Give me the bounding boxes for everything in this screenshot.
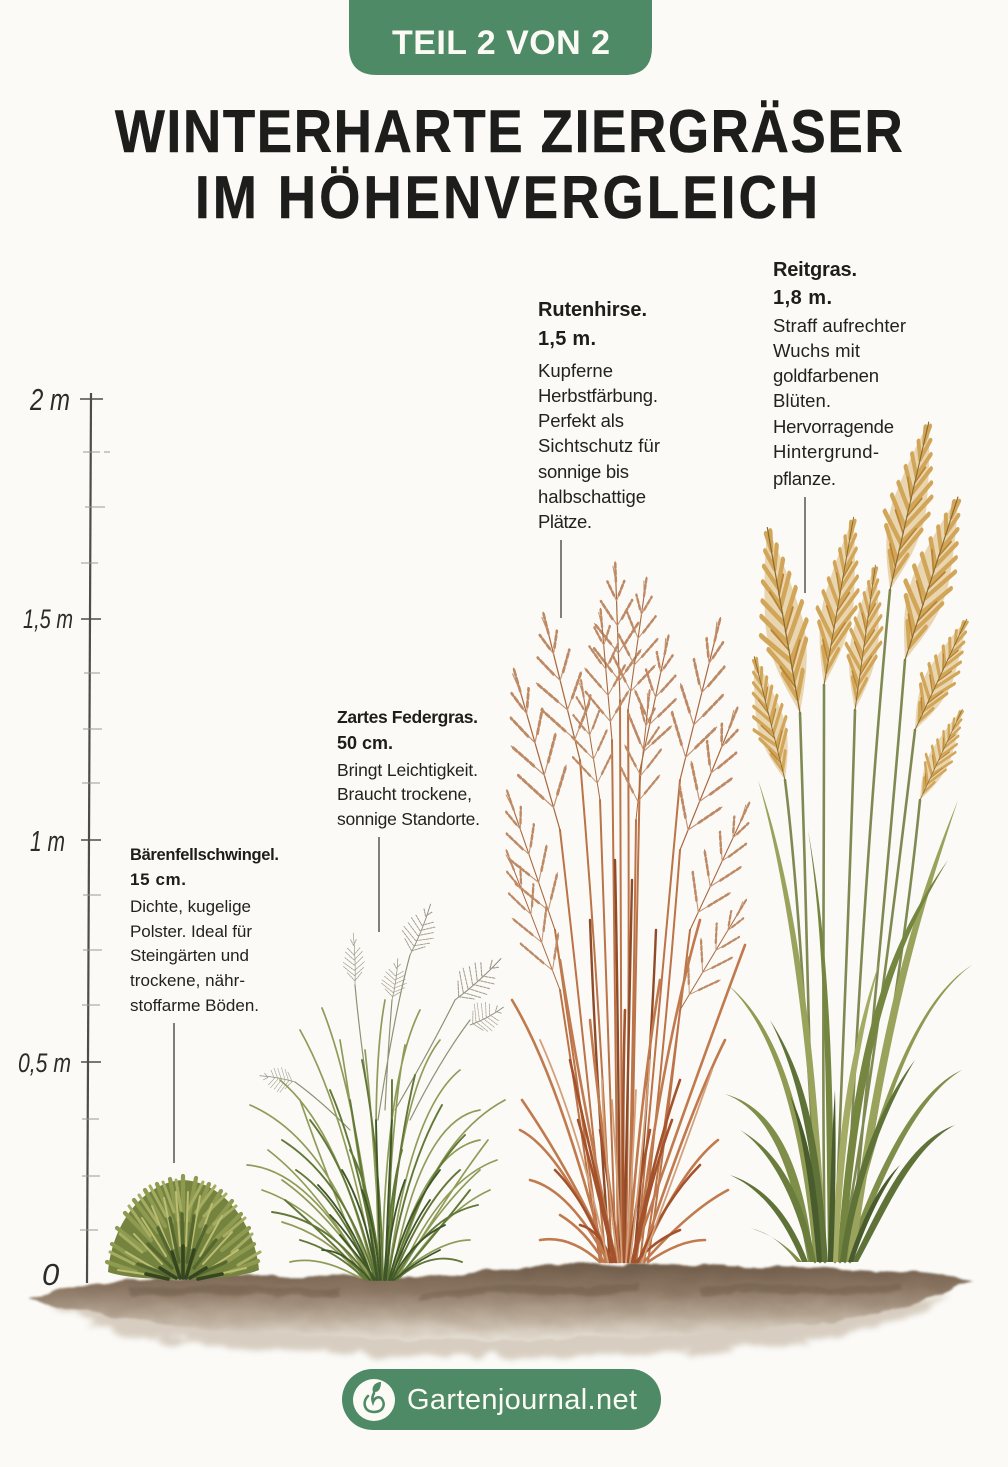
label: Bärenfellschwingel: Dichte, kugelige xyxy=(130,897,251,916)
label: Reitgras: goldfarbenen xyxy=(773,365,879,386)
golden panicles xyxy=(737,417,981,805)
label: Zartes Federgras xyxy=(337,707,480,932)
footer badge: Gartenjournal.net: Gartenjournal.net xyxy=(407,1384,637,1416)
footer badge: Gartenjournal.net xyxy=(342,1369,661,1430)
copper leaves xyxy=(512,920,745,1262)
soil strip xyxy=(28,1264,972,1356)
label: Bärenfellschwingel: Polster. Ideal für xyxy=(130,922,252,941)
label: Rutenhirse: Kupferne xyxy=(538,360,613,381)
flower stems xyxy=(785,590,920,1262)
label: Rutenhirse: sonnige bis xyxy=(538,461,629,482)
label: Zartes Federgras: Braucht trockene, xyxy=(337,784,472,804)
label: Reitgras: Hervorragende xyxy=(773,416,894,437)
label: Reitgras: Reitgras. xyxy=(773,259,857,281)
label: Zartes Federgras: Bringt Leichtigkeit. xyxy=(337,760,478,780)
badge: part 2 of 2 xyxy=(349,0,652,75)
plant: Reitgras xyxy=(725,417,981,1262)
label: Bärenfellschwingel: trockene, nähr- xyxy=(130,971,245,990)
ruler label: 2 m: 2 m xyxy=(29,382,70,417)
label: Reitgras xyxy=(773,259,906,593)
grass blades xyxy=(247,1000,505,1280)
plant: Zartes Federgras xyxy=(247,898,512,1280)
label: Zartes Federgras: 50 cm. xyxy=(337,733,393,753)
label: Rutenhirse: halbschattige xyxy=(538,486,646,507)
label: Rutenhirse: Plätze. xyxy=(538,511,592,532)
ruler label: 0,5 m: 0,5 m xyxy=(18,1048,71,1078)
title: IM HÖHENVERGLEICH xyxy=(195,164,818,231)
label: Rutenhirse: Perfekt als xyxy=(538,410,624,431)
badge: part 2 of 2: TEIL 2 VON 2 xyxy=(392,24,610,62)
title xyxy=(115,98,903,231)
feathery panicles xyxy=(257,898,512,1130)
ruler label: 1 m: 1 m xyxy=(30,826,65,858)
label: Bärenfellschwingel: stoffarme Böden. xyxy=(130,996,259,1015)
label: Rutenhirse xyxy=(538,299,660,618)
label: Reitgras: Straff aufrechter xyxy=(773,315,906,336)
ruler label: 0: 0 xyxy=(42,1257,59,1292)
outer needles xyxy=(107,1176,258,1272)
plant: Bärenfellschwingel xyxy=(107,1176,260,1279)
title: WINTERHARTE ZIERGRÄSER xyxy=(115,98,903,165)
label: Rutenhirse: Rutenhirse. xyxy=(538,299,647,321)
inner needles xyxy=(118,1192,246,1276)
label: Rutenhirse: Herbstfärbung. xyxy=(538,385,658,406)
label: Reitgras: pflanze. xyxy=(773,468,836,489)
height ruler xyxy=(18,382,110,1292)
label: Rutenhirse: Sichtschutz für xyxy=(538,435,660,456)
plant: Rutenhirse xyxy=(486,561,769,1262)
icon: sprout logo xyxy=(353,1379,395,1421)
label: Reitgras: Hintergrund- xyxy=(773,441,879,462)
label: Bärenfellschwingel: 15 cm. xyxy=(130,870,186,889)
label: Rutenhirse: 1,5 m. xyxy=(538,328,596,350)
label: Reitgras: Wuchs mit xyxy=(773,340,860,361)
label: Reitgras: 1,8 m. xyxy=(773,287,832,309)
ruler label: 1,5 m: 1,5 m xyxy=(23,604,73,634)
label: Zartes Federgras: sonnige Standorte. xyxy=(337,809,480,829)
copper panicles xyxy=(486,561,769,1020)
label: Bärenfellschwingel: Bärenfellschwingel. xyxy=(130,846,279,864)
label: Bärenfellschwingel: Steingärten und xyxy=(130,946,249,965)
label: Reitgras: Blüten. xyxy=(773,390,831,411)
stems xyxy=(555,700,690,1262)
label: Zartes Federgras: Zartes Federgras. xyxy=(337,707,478,727)
label: Bärenfellschwingel xyxy=(130,846,279,1163)
green leaves xyxy=(725,780,972,1262)
